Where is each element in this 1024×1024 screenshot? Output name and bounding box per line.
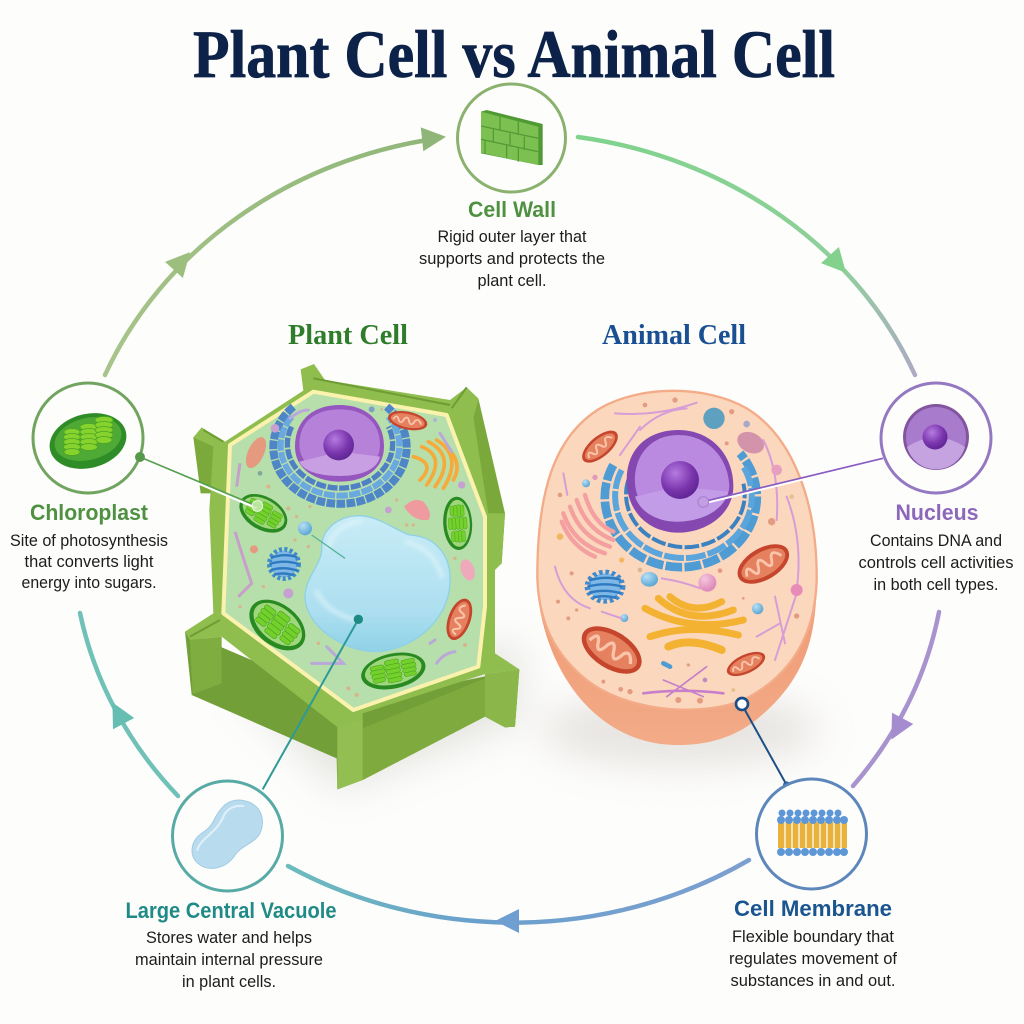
heading: nucleus: Nucleus (896, 500, 978, 525)
node ring: cell membrane (756, 779, 866, 889)
description: vacuole (135, 929, 323, 991)
node ring: nucleus (881, 383, 991, 493)
icon: chloroplast (44, 405, 132, 477)
node ring: vacuole (172, 781, 282, 891)
description: cell membrane: Flexible boundary that (732, 928, 894, 946)
title: Plant Cell vs Animal Cell (193, 16, 835, 92)
description: chloroplast (10, 532, 168, 592)
description: cell wall: Rigid outer layer that (438, 228, 587, 246)
description: nucleus: Contains DNA and (870, 532, 1002, 550)
icon: vacuole (192, 800, 262, 868)
description: nucleus (858, 532, 1014, 594)
node: cell wall (419, 84, 605, 290)
plant small organelles (235, 406, 478, 697)
heading: vacuole: Large Central Vacuole (126, 898, 336, 923)
node: chloroplast (10, 383, 168, 592)
heading: chloroplast: Chloroplast (30, 500, 149, 525)
animal pink golgi (562, 495, 613, 557)
icon: brick wall (481, 110, 543, 165)
leader: nucleus (698, 458, 883, 507)
node: nucleus (858, 383, 1014, 594)
icon: nucleus (903, 404, 969, 470)
animal filaments (555, 403, 799, 697)
animal cell body (537, 391, 817, 745)
arrow: cell membrane to vacuole (288, 860, 749, 933)
description: vacuole: Stores water and helps (146, 929, 312, 947)
animal mitochondria (574, 425, 796, 683)
description: chloroplast: energy into sugars. (22, 574, 156, 592)
node ring: cell wall (458, 84, 566, 192)
animal nucleus (627, 430, 733, 533)
arrow: cell wall to nucleus (578, 137, 915, 375)
plant chloroplasts (233, 486, 474, 695)
description: chloroplast: that converts light (24, 553, 154, 571)
animal endoplasmic reticulum (605, 453, 757, 567)
leader: cell membrane (736, 698, 790, 789)
node ring: chloroplast (33, 383, 143, 493)
heading: plant cell: Plant Cell (288, 320, 408, 351)
plant nucleus (295, 405, 384, 482)
icon: phospholipid bilayer (777, 810, 848, 856)
animal small organelles (582, 408, 768, 667)
heading: animal cell: Animal Cell (602, 320, 746, 351)
heading: cell membrane: Cell Membrane (734, 896, 892, 921)
leader: chloroplast (140, 457, 263, 511)
plant cell wall (185, 364, 519, 789)
arrow: vacuole to chloroplast (80, 613, 178, 796)
arrow: chloroplast to cell wall (105, 125, 447, 375)
node: large central vacuole (126, 781, 336, 991)
animal orange golgi (645, 597, 743, 650)
plant cell illustration (140, 364, 519, 789)
animal cell illustration (537, 391, 883, 789)
description: nucleus: in both cell types. (874, 576, 998, 594)
plant cytoplasm and membrane (223, 392, 485, 710)
description: vacuole: maintain internal pressure (135, 951, 323, 969)
leader: vacuole (263, 615, 363, 789)
soft shadows under cells (230, 640, 820, 790)
heading: cell wall: Cell Wall (468, 197, 556, 222)
description: cell membrane (729, 928, 897, 990)
description: cell wall (419, 228, 605, 290)
arrow: nucleus to cell membrane (853, 612, 939, 786)
animal dots (556, 397, 803, 704)
description: nucleus: controls cell activities (858, 554, 1014, 572)
plant endoplasmic reticulum (273, 407, 407, 504)
description: cell wall: supports and protects the (419, 250, 605, 268)
description: cell wall: plant cell. (478, 272, 546, 290)
plant vacuole (305, 516, 450, 652)
cycle arrows ring (80, 125, 939, 933)
description: cell membrane: substances in and out. (730, 972, 896, 990)
description: vacuole: in plant cells. (182, 973, 276, 991)
node: cell membrane (729, 779, 897, 990)
description: cell membrane: regulates movement of (729, 950, 897, 968)
description: chloroplast: Site of photosynthesis (10, 532, 168, 550)
plant golgi (413, 440, 457, 488)
plant mitochondria (386, 408, 477, 644)
